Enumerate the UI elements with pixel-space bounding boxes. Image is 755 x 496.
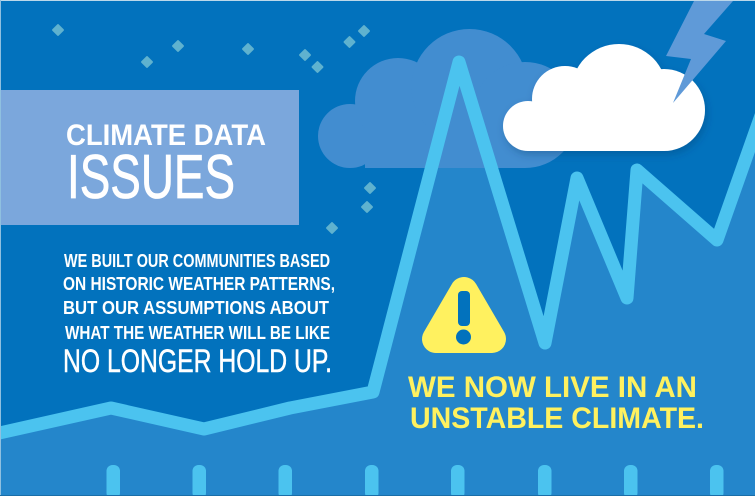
background cloud: [318, 29, 578, 168]
icon: lightning bolt: [666, 1, 733, 103]
title: [66, 119, 266, 212]
white cloud: [503, 44, 705, 151]
body text: BUT OUR ASSUMPTIONS ABOUT: [63, 297, 330, 318]
title: CLIMATE DATA: [66, 119, 266, 152]
icon: warning triangle: [436, 291, 492, 344]
body text: ON HISTORIC WEATHER PATTERNS,: [63, 273, 335, 294]
line chart: [0, 62, 755, 434]
body text: NO LONGER HOLD UP.: [63, 343, 332, 379]
tick marks: [106, 465, 724, 496]
body text: WE BUILT OUR COMMUNITIES BASED: [64, 250, 330, 271]
title: ISSUES: [67, 143, 235, 212]
callout: unstable climate: UNSTABLE CLIMATE.: [410, 402, 704, 435]
body text: WHAT THE WEATHER WILL BE LIKE: [65, 322, 330, 343]
stars / diamonds: [53, 25, 375, 233]
callout: unstable climate: WE NOW LIVE IN AN: [408, 371, 697, 404]
title panel: [0, 90, 299, 225]
body text: [63, 250, 335, 379]
callout: unstable climate: [408, 371, 704, 435]
